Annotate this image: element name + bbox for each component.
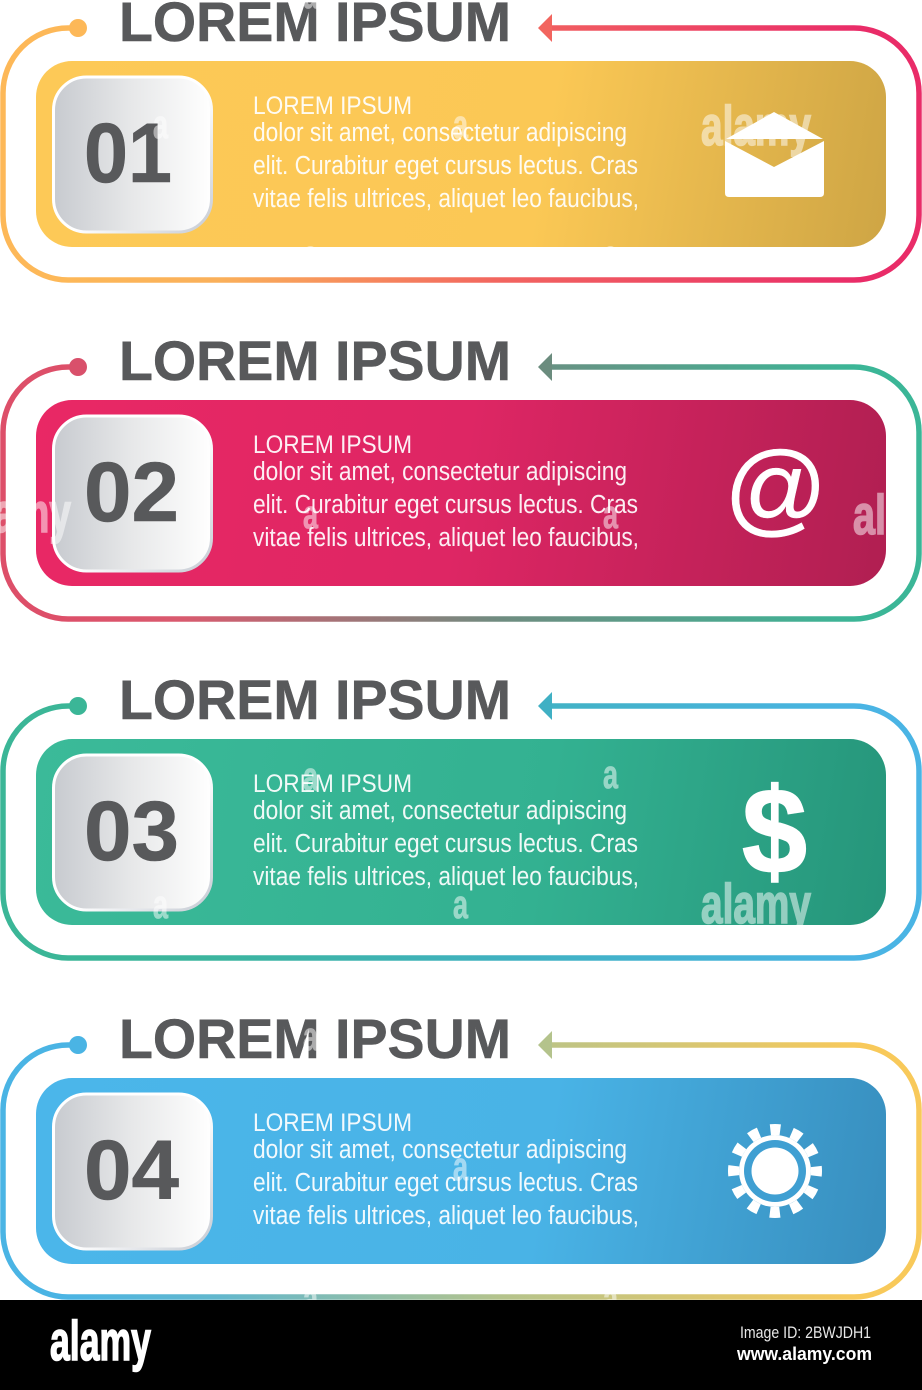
text block 01: dolor sit amet, consectetur adipiscing: [253, 119, 627, 147]
text block 02: elit. Curabitur eget cursus lectus. Cras: [253, 491, 638, 519]
watermark 02 right: al: [853, 483, 886, 546]
text block 01: [253, 92, 639, 213]
text block 03: elit. Curabitur eget cursus lectus. Cras: [253, 830, 638, 858]
number badge 03: [54, 755, 212, 910]
text block 04: dolor sit amet, consectetur adipiscing: [253, 1136, 627, 1164]
icon: at sign: @: [724, 431, 828, 545]
small watermark marks: a: [153, 103, 169, 147]
small watermark marks: a: [453, 1145, 469, 1189]
icon: dollar sign: $: [742, 763, 807, 899]
text block 04: [253, 1109, 639, 1230]
small watermark marks: a: [603, 753, 619, 797]
text block 02: dolor sit amet, consectetur adipiscing: [253, 458, 627, 486]
text block 04: vitae felis ultrices, aliquet leo faucibus,: [253, 1202, 639, 1230]
website: www.alamy.com: [736, 1344, 872, 1364]
panel: step 01: [3, 0, 919, 280]
footer bar: [0, 1300, 922, 1390]
small watermark marks: a: [153, 883, 169, 927]
small watermark marks: a: [453, 103, 469, 147]
number badge 02: [54, 416, 212, 571]
text block 02: LOREM IPSUM: [253, 431, 412, 459]
text block 02: vitae felis ultrices, aliquet leo faucibus,: [253, 524, 639, 552]
text block 01: vitae felis ultrices, aliquet leo faucibus,: [253, 185, 639, 213]
text block 03: vitae felis ultrices, aliquet leo faucibus,: [253, 863, 639, 891]
colour bar 01: [36, 61, 886, 247]
small watermark marks: a: [303, 1015, 319, 1059]
panel: step 03: [3, 668, 919, 958]
text block 03: [253, 770, 639, 891]
small watermark marks: a: [603, 493, 619, 537]
heading 04: LOREM IPSUM: [119, 1007, 511, 1070]
number badge 04: [54, 1094, 212, 1249]
heading 03: LOREM IPSUM: [119, 668, 511, 731]
text block 01: LOREM IPSUM: [253, 92, 412, 120]
small watermark marks: a: [303, 1277, 319, 1321]
text block 04: elit. Curabitur eget cursus lectus. Cras: [253, 1169, 638, 1197]
icon: gear: [734, 1130, 816, 1212]
watermark 01: alamy: [701, 94, 811, 157]
outline arrow 03: [3, 692, 919, 958]
panel: step 04: [3, 1007, 919, 1297]
small watermark marks: a: [603, 233, 619, 277]
icon: envelope: [725, 112, 824, 197]
text block 02: [253, 431, 639, 552]
number badge 02: 02: [84, 445, 179, 539]
number badge 03: 03: [84, 784, 179, 878]
small watermark marks: a: [603, 1277, 619, 1321]
text block 01: elit. Curabitur eget cursus lectus. Cras: [253, 152, 638, 180]
panel: step 02: [0, 329, 919, 619]
footer logo: alamy: [50, 1309, 151, 1372]
outline arrow 04: [3, 1031, 919, 1297]
heading 02: LOREM IPSUM: [119, 329, 511, 392]
text block 03: LOREM IPSUM: [253, 770, 412, 798]
colour bar 02: [36, 400, 886, 586]
number badge 01: [54, 77, 212, 232]
number badge 04: 04: [84, 1123, 179, 1217]
image id: Image ID: 2BWJDH1: [740, 1323, 871, 1342]
text block 03: dolor sit amet, consectetur adipiscing: [253, 797, 627, 825]
colour bar 03: [36, 739, 886, 925]
small watermark marks: a: [453, 883, 469, 927]
outline arrow 01: [3, 14, 919, 280]
colour bar 04: [36, 1078, 886, 1264]
small watermark marks: a: [303, 755, 319, 799]
small watermark marks: a: [303, 493, 319, 537]
small watermark marks: [153, 0, 619, 1321]
small watermark marks: a: [303, 233, 319, 277]
text block 04: LOREM IPSUM: [253, 1109, 412, 1137]
number badge 01: 01: [84, 106, 172, 200]
outline arrow 02: [3, 353, 919, 619]
